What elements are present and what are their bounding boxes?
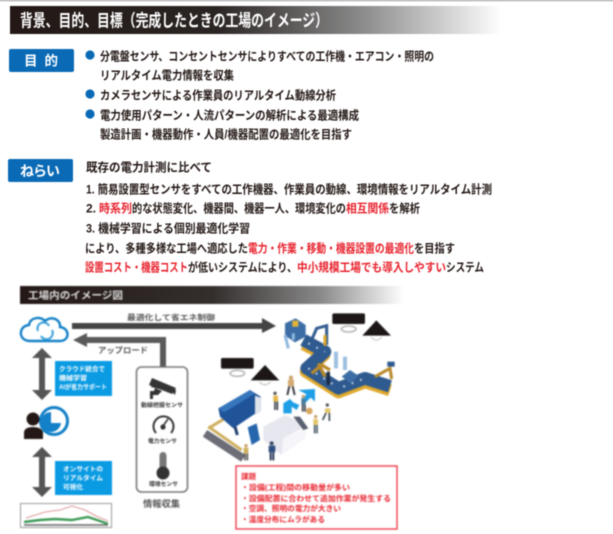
label: power sensor: 電力センサ — [148, 437, 178, 445]
aims text block: が低いシステムにより、 — [188, 259, 297, 274]
purpose bullet list: 電力使用パターン・人流パターンの解析による最適構成 — [100, 107, 359, 122]
panel: sensor box — [136, 367, 188, 492]
panel: purpose — [9, 48, 434, 141]
aims text block: 時系列 — [99, 200, 132, 215]
callout: issues — [236, 466, 397, 529]
illustration: lower factory floor — [205, 358, 330, 460]
arrow: upload — [73, 333, 166, 368]
aims text block: 3. 機械学習による個別最適化学習 — [86, 220, 250, 235]
aims text block: 中小規模工場でも導入しやすい — [297, 259, 446, 274]
icon: lower lamp — [251, 365, 279, 385]
aims text block: システム — [446, 260, 484, 274]
callout: issues: ・設備配置に合わせて追加作業が発生する — [241, 494, 391, 503]
chart thumbnail — [20, 504, 112, 528]
white machine — [263, 415, 308, 455]
illustration: upper production line — [285, 313, 395, 392]
arrow: analysis to monitoring — [32, 447, 52, 497]
icon: upper lamp — [362, 320, 391, 340]
label: temperature sensor: 環境センサ — [149, 480, 179, 488]
blue cabinet — [248, 423, 260, 445]
conveyor line — [303, 340, 390, 392]
aims text block: 既存の電力計測に比べて — [86, 159, 212, 174]
diagram heading: 工場内のイメージ図 — [28, 289, 123, 302]
panel: aims — [8, 159, 492, 274]
callout: on-site realtime: オンサイトの — [63, 465, 103, 473]
badge: purpose — [9, 49, 74, 72]
panel: factory image diagram — [20, 286, 404, 529]
purpose bullet list: リアルタイム電力情報を収集 — [100, 67, 234, 82]
callout: cloud learning: AIが省力サポート — [59, 382, 107, 391]
arrow: cloud to analysis — [32, 348, 52, 400]
arrow: energy saving control: 最適化して省エネ制御 — [127, 312, 216, 322]
aims text block — [85, 159, 492, 274]
callout: issues: ・空調、照明の電力が大きい — [241, 504, 341, 513]
arrow: energy saving control — [72, 312, 276, 333]
aims text block: 設置コスト・機器コスト — [85, 259, 188, 274]
icon: camera — [149, 378, 178, 399]
callout: issues: 課題 — [241, 472, 257, 481]
callout: on-site realtime: 可視化 — [63, 482, 84, 491]
diagram heading — [20, 286, 404, 304]
workers — [244, 376, 330, 460]
callout: cloud learning: クラウド統合で — [59, 364, 105, 373]
aims text block: 相互関係 — [346, 200, 389, 215]
label: camera sensor: 動線把握センサ — [141, 401, 184, 409]
callout: on-site realtime: リアルタイム — [63, 473, 104, 482]
callout: issues: ・設備(工程)間の移動量が多い — [241, 483, 350, 492]
callout: on-site realtime — [55, 461, 112, 495]
lower-left conveyor — [205, 418, 243, 458]
blue machine — [218, 390, 261, 435]
badge: purpose: 目 的 — [24, 52, 58, 68]
icon: gauge — [154, 416, 174, 433]
purpose bullet list: 製造計画・機器動作・人員/機器配置の最適化を目指す — [100, 126, 352, 141]
aims text block: 2. — [86, 201, 96, 215]
robots and machines — [285, 318, 395, 385]
icon: person and clock — [24, 408, 68, 439]
aims text block: により、多種多様な工場へ適応した — [85, 240, 248, 255]
purpose bullet list: 分電盤センサ、コンセントセンサによりすべての工作機・エアコン・照明の — [100, 48, 434, 63]
badge: aims — [8, 159, 73, 182]
aims text block: 1. 簡易設置型センサをすべての工作機器、作業員の動線、環境情報をリアルタイム計測 — [86, 181, 492, 196]
icon: cloud — [21, 318, 68, 341]
purpose bullet list: カメラセンサによる作業員のリアルタイム動線分析 — [100, 87, 336, 102]
callout: issues: ・温度分布にムラがある — [241, 515, 325, 524]
title text: 背景、目的、目標（完成したときの工場のイメージ） — [20, 10, 328, 30]
aims text block: を解析 — [389, 200, 420, 215]
flow arrows — [283, 389, 315, 413]
aims text block: 電力・作業・移動・機器設置の最適化 — [248, 240, 414, 255]
title banner — [10, 6, 502, 34]
icon: lower air conditioner — [221, 358, 254, 376]
purpose bullet list — [85, 48, 434, 141]
aims text block: を目指す — [414, 240, 455, 255]
callout: cloud learning: 機械学習 — [59, 373, 87, 382]
icon: thermometer — [156, 452, 170, 480]
label: information collection: 情報収集 — [143, 498, 180, 509]
icon: upper air conditioner — [332, 313, 365, 332]
callout: cloud learning — [55, 361, 112, 396]
arrow: upload: アップロード — [98, 346, 148, 355]
aims text block: 的な状態変化、機器間、機器一人、環境変化の — [132, 200, 346, 215]
badge: aims: ねらい — [20, 163, 60, 179]
